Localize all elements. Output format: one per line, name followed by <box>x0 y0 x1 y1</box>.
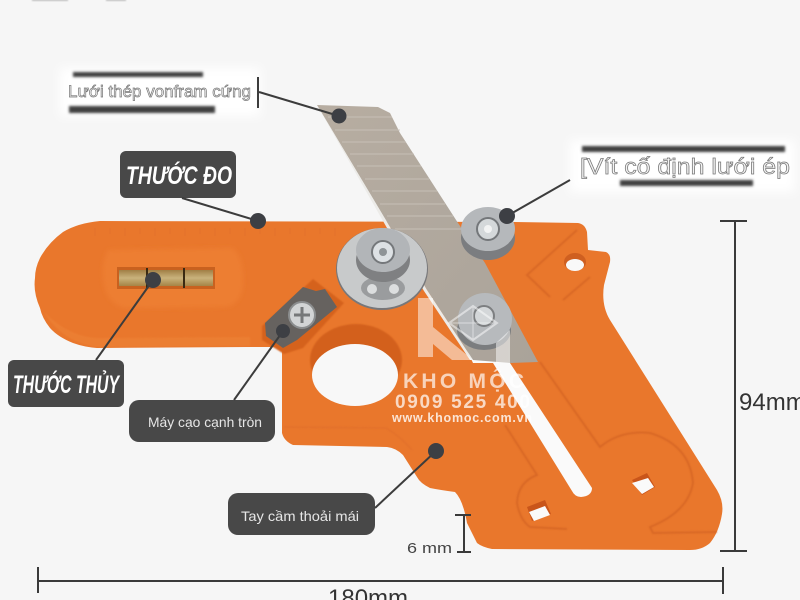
handle finger hole <box>310 324 402 396</box>
label: fixing screw: [Vít cố định lưới ép <box>580 154 790 179</box>
label: ruler: THƯỚC ĐO <box>126 161 232 190</box>
lower fixing screw <box>457 293 512 350</box>
watermark: Kho Mộc: KHO MỘC <box>403 369 524 393</box>
orange body shape <box>35 221 722 550</box>
watermark logo <box>418 298 510 363</box>
notch hole <box>564 253 586 271</box>
top cropped caption remnants <box>32 0 126 1</box>
label: fixing screw <box>499 140 795 224</box>
label: handle: Tay cầm thoải mái <box>241 508 359 524</box>
dimension: height 94mm <box>720 221 800 551</box>
watermark: Kho Mộc <box>391 298 532 425</box>
blade slot <box>466 345 592 497</box>
label: spirit level <box>8 272 161 407</box>
square slots <box>527 473 655 521</box>
ruler ticks <box>95 228 335 236</box>
round edge scraper <box>262 279 344 354</box>
label: spirit level: THƯỚC THỦY <box>13 369 120 399</box>
label: handle <box>228 443 444 535</box>
blade <box>317 105 538 363</box>
label: round edge scraper <box>129 324 290 442</box>
dimension: width 180mm <box>38 567 723 600</box>
large washer and knob <box>336 228 428 310</box>
dimension: 6 mm <box>407 515 471 557</box>
label: blade: Lưới thép vonfram cứng <box>68 82 251 101</box>
watermark: Kho Mộc: www.khomoc.com.vn <box>391 411 532 425</box>
dimension: 6 mm: 6 mm <box>407 540 452 557</box>
label: round edge scraper: Máy cạo cạnh tròn <box>148 414 262 430</box>
tool body <box>35 105 722 550</box>
label: ruler <box>120 151 266 229</box>
upper fixing screw <box>461 207 515 260</box>
level window <box>117 267 215 289</box>
watermark: Kho Mộc: 0909 525 400 <box>395 392 530 413</box>
moulded grooves <box>505 230 717 533</box>
lower bevels <box>44 312 250 347</box>
recess around level <box>103 248 243 308</box>
label: blade <box>60 68 346 124</box>
